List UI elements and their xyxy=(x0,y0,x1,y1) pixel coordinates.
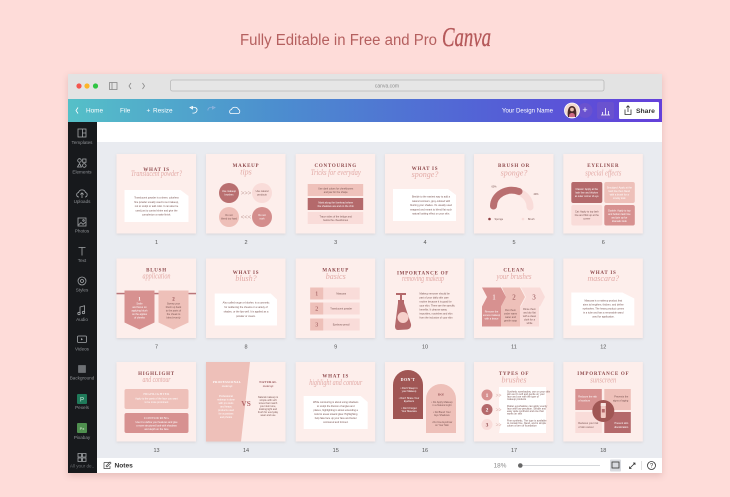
slide 17: types of brushes: TYPES OF xyxy=(499,372,529,377)
tool: background xyxy=(70,365,95,380)
share button: Share xyxy=(636,108,655,115)
slide 5: brush or sponge gauge xyxy=(474,154,554,246)
address bar: canva.com xyxy=(375,84,399,90)
slide 2: makeup tips: products xyxy=(257,194,268,196)
slide 10: importance of removing makeup: benefits. It cleanse away xyxy=(420,308,448,312)
slide 14: professional vs natural makeup: VS xyxy=(241,399,251,408)
slide 11: clean your brushes steps: Run them xyxy=(505,309,516,312)
slide 12: what is mascara: 12 xyxy=(600,344,606,350)
slide 9: makeup basics list: 3 xyxy=(315,322,318,328)
slide 14: professional vs natural makeup: Professional xyxy=(219,395,233,398)
slide 13: highlight and contour: Use it to define your features and give xyxy=(135,421,178,424)
tool: photos: Photos xyxy=(75,228,90,234)
slide 1: translucent powder: Translucent powder is a sheer, colorless xyxy=(134,196,180,200)
slide 3: contouring tricks: Tricks for everyday xyxy=(311,168,361,177)
slide 14: professional vs natural makeup xyxy=(206,362,286,454)
fullscreen icon xyxy=(630,463,635,468)
slide 11: clean your brushes steps: 11 xyxy=(511,344,517,350)
tool: elements: Elements xyxy=(72,170,92,174)
slide 4: what is sponge: WHAT IS xyxy=(412,167,438,172)
slide 14: professional vs natural makeup: 14 xyxy=(243,448,249,454)
slide 11: clean your brushes steps: with a clean xyxy=(523,315,537,318)
slide 11: clean your brushes steps: cloth for a xyxy=(524,318,536,322)
slide 13: highlight and contour xyxy=(116,362,196,454)
design name: Your Design Name xyxy=(502,108,553,114)
tool: uploads xyxy=(74,190,91,204)
slide 3: contouring tricks: and jaw for the shape xyxy=(324,191,348,194)
slide 15: what is highlight and contour: highlight and contour xyxy=(309,378,363,387)
slide 14: professional vs natural makeup: your skin tone, xyxy=(260,405,276,408)
slide 7: blush application: blend evenly xyxy=(166,316,181,320)
left menu: + xyxy=(146,108,150,114)
slide 10: importance of removing makeup: removing makeup xyxy=(402,274,444,283)
tool: pexels xyxy=(75,394,90,410)
slide 5: brush or sponge gauge: sponge? xyxy=(501,168,527,178)
slide 11: clean your brushes steps: while xyxy=(527,322,533,325)
browser window xyxy=(68,74,662,473)
arch: do: Eye Shadows xyxy=(434,414,450,417)
slide 10: importance of removing makeup: part of your daily skin care xyxy=(420,296,449,300)
slide 1: translucent powder: 1 xyxy=(155,240,158,246)
notes button xyxy=(104,462,133,470)
slide 9: makeup basics list: Translucent powder xyxy=(330,308,352,310)
notes button: Notes xyxy=(114,462,133,470)
slide 14: professional vs natural makeup: looking light and xyxy=(259,408,278,411)
slide 13: highlight and contour: Apply to the parts of the face you want xyxy=(135,398,178,400)
slide 12: what is mascara: WHAT IS xyxy=(590,271,617,276)
slide 7: blush application xyxy=(116,258,196,350)
slide 3: contouring tricks: Mark along the forehead where xyxy=(318,202,354,204)
slide 13: highlight and contour: and depth on the face xyxy=(144,428,169,431)
slide 18: importance of sunscreen: Reduces your risk xyxy=(578,422,599,425)
slide 2: makeup tips: brushes xyxy=(225,194,234,196)
slide 11: clean your brushes steps xyxy=(474,258,554,350)
slide 7: blush application: applying blush xyxy=(132,310,148,312)
window shadow xyxy=(68,76,662,476)
tool: all your designs: All your de.. xyxy=(70,464,94,468)
slide 15: what is highlight and contour: While contouring is about using shadows xyxy=(313,401,359,404)
slide 6: eyeliner special effects: 6 xyxy=(602,240,605,246)
traffic lights xyxy=(76,83,98,89)
slide 14: professional vs natural makeup: Natural makeup is xyxy=(258,396,279,399)
tool: pexels: P xyxy=(80,398,84,404)
slide 10: importance of removing makeup xyxy=(385,258,464,350)
help icon: ? xyxy=(650,464,654,470)
slide 14: professional vs natural makeup: fresh for everyday xyxy=(258,411,279,414)
icon: sunscreen tube xyxy=(601,403,606,418)
slide 6: eyeliner special effects: at outer corner of eye xyxy=(575,195,599,198)
slide 11: clean your brushes steps: water and xyxy=(505,316,517,319)
tool: background: Background xyxy=(70,376,95,380)
slide 17: types of brushes: 3 xyxy=(486,422,489,428)
slide 17: types of brushes: face with low precision. Simple and xyxy=(507,408,547,410)
slide 7: blush application: 7 xyxy=(155,344,158,350)
slide 7: blush application: to the parts of xyxy=(166,310,181,312)
arch: do: • Do Apply Makeup xyxy=(431,401,453,404)
slide 9: makeup basics list: 2 xyxy=(315,306,318,312)
slide 14: professional vs natural makeup: makeup xyxy=(263,384,274,388)
slide 3: contouring tricks: Use dark colors for cheekbones xyxy=(318,188,354,190)
slide 6: eyeliner special effects: with a brush for a xyxy=(610,194,629,196)
slide 14: professional vs natural makeup: with pro tools xyxy=(219,402,234,405)
slide 8: what is blush: for reddening the cheeks or a variety of xyxy=(224,306,268,309)
arch: don't: • Don't Forget xyxy=(401,407,417,410)
slide 18: importance of sunscreen: of sunburn xyxy=(578,400,591,402)
slide 17: types of brushes: to contain fine, blend, and is simple xyxy=(507,422,547,425)
slide 17: types of brushes: 17 xyxy=(511,448,517,454)
slide 17: types of brushes: colors a form of foundation xyxy=(507,424,537,428)
slide 12: what is mascara: aims to lengthen, thicken, and define xyxy=(583,304,624,306)
slide 11: clean your brushes steps: with a tissue xyxy=(485,318,499,320)
slide 2: makeup tips: blend too hard xyxy=(221,218,238,220)
slide 14: professional vs natural makeup: makeup xyxy=(222,384,233,388)
slide 13: highlight and contour: a more structured look with shadows xyxy=(136,424,178,428)
slide 8: what is blush: Also called rouge or blusher, is a cosmetic xyxy=(223,302,270,304)
slide 18: importance of sunscreen: Reduces the risk xyxy=(578,396,598,398)
slide 10: importance of removing makeup: routine because it is good for xyxy=(420,300,452,304)
slide 4: what is sponge: Beside to the easiest way to add a xyxy=(412,196,451,198)
slide 1: translucent powder: fine powder usually used to set makeup, xyxy=(134,201,179,204)
slide 4: what is sponge: natural contours, grey-colored with xyxy=(412,200,451,203)
slide 15: what is highlight and contour xyxy=(296,362,375,454)
slide 15: what is highlight and contour: contoured and formed. xyxy=(323,421,349,424)
slide 6: eyeliner special effects: Classic: Apply at the xyxy=(576,188,599,191)
slide 13: highlight and contour: HIGHLIGHT xyxy=(138,372,175,377)
slide 18: importance of sunscreen: sunscreen xyxy=(590,376,616,384)
slide 11: clean your brushes steps: under warm xyxy=(504,312,517,316)
slide 16: don't and do arches xyxy=(385,362,464,454)
tool: styles xyxy=(76,277,89,292)
slide 1: translucent powder: complexion a matte finish. xyxy=(142,214,171,217)
slide 17: types of brushes: Synthetic eyeshadow, use on your skin xyxy=(507,390,551,394)
slide 11: clean your brushes steps: 3 xyxy=(532,294,536,302)
slide 2: makeup tips: MAKEUP xyxy=(233,164,259,169)
arch: do: on Your Skin xyxy=(435,424,450,427)
slide 7: blush application: and focus on xyxy=(132,306,147,309)
tool: audio: Audio xyxy=(76,317,88,322)
slide 9: makeup basics list: Eyebrow pencil xyxy=(333,324,350,326)
left menu: File xyxy=(120,108,131,114)
slide 17: types of brushes: >> xyxy=(496,422,501,428)
slide 7: blush application: 2 xyxy=(172,298,175,302)
slide 6: eyeliner special effects: Cat: Apply to top lash xyxy=(575,210,599,214)
slide 17: types of brushes: face and use with the type of xyxy=(507,396,539,398)
zoom slider xyxy=(518,463,600,468)
address bar xyxy=(170,80,604,91)
tool: pixabay: Pixabay xyxy=(74,435,91,440)
tool: videos: Videos xyxy=(75,346,90,352)
slide 7: blush application: BLUSH xyxy=(146,268,167,274)
slide 12: what is mascara: used for application. xyxy=(592,316,615,318)
tool: elements xyxy=(72,159,92,174)
slide 15: what is highlight and contour: to sculpt the illusion of angles and xyxy=(317,405,355,408)
slide 6: eyeliner special effects: special effects xyxy=(585,168,621,178)
slide 1: translucent powder xyxy=(116,154,196,246)
slide 8: what is blush: powder or cream. xyxy=(236,315,256,318)
slide 3: contouring tricks xyxy=(296,154,375,246)
slide 17: types of brushes: easy quite synthetic and one that xyxy=(507,410,544,413)
slide 18: importance of sunscreen: Prevent skin xyxy=(615,422,629,425)
slide 2: makeup tips: Use natural xyxy=(256,190,269,193)
slide 4: what is sponge: sponge? xyxy=(412,170,438,179)
left menu xyxy=(76,108,173,114)
arch: do: in a Natural Light xyxy=(433,404,452,407)
slide 1: translucent powder: WHAT IS xyxy=(143,168,170,173)
slide 13: highlight and contour: to be more prominent xyxy=(145,401,169,404)
slide 14: professional vs natural makeup: PROFESSIONAL xyxy=(213,380,241,384)
slide 18: importance of sunscreen xyxy=(563,362,643,454)
slide 4: what is sponge: 4 xyxy=(423,240,427,246)
slide 6: eyeliner special effects: corner xyxy=(583,218,591,220)
slide 13: highlight and contour: HIGHLIGHTER xyxy=(143,392,170,396)
slide 17: types of brushes xyxy=(474,362,554,454)
slide 6: eyeliner special effects: line and flick up at the xyxy=(575,214,599,217)
share button xyxy=(619,102,659,119)
slide 17: types of brushes: brushes xyxy=(502,376,526,384)
slide 9: makeup basics list: 9 xyxy=(334,344,337,350)
slide 17: types of brushes: >> xyxy=(496,407,501,413)
slide 6: eyeliner special effects: Double: Apply to top xyxy=(608,210,631,212)
slide 9: makeup basics list: MAKEUP xyxy=(322,268,349,274)
slide 11: clean your brushes steps: CLEAN xyxy=(503,268,525,274)
slide 7: blush application: of cheeks xyxy=(134,316,146,320)
slide 2: makeup tips xyxy=(206,154,286,246)
tool: all your designs xyxy=(70,454,94,468)
slide 15: what is highlight and contour: 15 xyxy=(333,448,339,454)
slide 11: clean your brushes steps: excess makeup xyxy=(483,314,501,317)
avatar xyxy=(564,103,592,118)
slide 1: translucent powder: used just to control shine and give the xyxy=(136,209,178,212)
slide 4: what is sponge: natural looking effect on your skin. xyxy=(412,213,450,216)
slide 2: makeup tips: tips xyxy=(240,168,252,176)
slide 3: contouring tricks: 3 xyxy=(334,240,337,246)
slide 11: clean your brushes steps: 2 xyxy=(512,294,516,302)
slide 4: what is sponge: blurring your shades. It's usually used xyxy=(410,204,452,207)
slide 6: eyeliner special effects: lash line then blend xyxy=(609,190,631,193)
slide 17: types of brushes: Fine synthetic. The type is available xyxy=(507,420,547,422)
slide 10: importance of removing makeup: from the inclusion of your skin xyxy=(420,316,453,320)
slide 11: clean your brushes steps: and dry flat xyxy=(523,312,536,314)
tool: audio xyxy=(76,306,88,322)
slide 6: eyeliner special effects: lash line and thicken xyxy=(575,192,599,194)
slide 10: importance of removing makeup: Makeup remover should be xyxy=(420,292,450,296)
heading: Canva xyxy=(442,22,491,52)
slide 12: what is mascara xyxy=(563,258,643,350)
tool: videos xyxy=(75,336,90,352)
slide 1: translucent powder: Translucent powder? xyxy=(131,169,182,178)
left menu: Resize xyxy=(153,108,173,114)
slide 14: professional vs natural makeup: and photos xyxy=(220,416,233,419)
sidebar toggle icon xyxy=(110,82,117,90)
slide 5: brush or sponge gauge: 5 xyxy=(512,240,516,246)
tool: text: Text xyxy=(78,258,87,263)
tool: uploads: Uploads xyxy=(74,199,91,204)
slide 10: importance of removing makeup: impurities, nourishes and skin xyxy=(420,312,453,316)
slide 9: makeup basics list: Mascara xyxy=(336,292,347,296)
slide 17: types of brushes: 1 xyxy=(486,393,489,399)
slide 3: contouring tricks: the shadows are and on the chin xyxy=(318,205,354,208)
slide 2: makeup tips: <<< xyxy=(241,215,252,221)
slide 7: blush application: on the apples xyxy=(132,313,148,316)
slide 17: types of brushes: 2 xyxy=(486,408,489,414)
arch: do: • Do Use Eyebrow xyxy=(432,421,452,424)
slide 11: clean your brushes steps: gentle soap xyxy=(504,320,518,322)
slide 7: blush application: blush up back xyxy=(166,306,182,309)
slide 8: what is blush: 8 xyxy=(244,344,248,350)
browser title bar xyxy=(68,74,662,99)
slide 6: eyeliner special effects: EYELINER xyxy=(587,164,619,169)
tool: pixabay: Px xyxy=(80,426,84,431)
slide 4: what is sponge: wrapped and meant to blend flat such xyxy=(410,208,452,211)
slide 8: what is blush: shades, or the lips well. It is applied as a xyxy=(224,310,269,314)
slide 2: makeup tips: 2 xyxy=(244,240,248,246)
zoom percentage: 18% xyxy=(494,462,507,470)
slide 14: professional vs natural makeup: products used xyxy=(218,409,234,412)
slide 15: what is highlight and contour: mold to areas toward glow. Highlighting xyxy=(314,413,358,416)
slide 13: highlight and contour: 13 xyxy=(153,448,160,454)
canvas area xyxy=(97,142,662,458)
arch: do: • Do Blend Your xyxy=(433,411,451,414)
heading: Fully Editable in Free and Pro xyxy=(240,32,437,49)
slide 18: importance of sunscreen: signs of aging xyxy=(613,400,629,402)
slide 2: makeup tips: >>> xyxy=(241,191,252,197)
left menu: Home xyxy=(86,108,103,114)
slide 15: what is highlight and contour: WHAT IS xyxy=(322,374,349,380)
slide 2: makeup tips: rush xyxy=(260,218,265,220)
tool: templates: Templates xyxy=(72,140,93,145)
slide 6: eyeliner special effects: smoky look xyxy=(613,197,626,200)
slide 18: importance of sunscreen: of skin cancer xyxy=(578,426,594,429)
slide 12: what is mascara: in a tube and has a removable wand xyxy=(583,312,624,314)
slide 6: eyeliner special effects: dramatic look xyxy=(612,220,627,223)
slide 14: professional vs natural makeup: for occasions xyxy=(219,412,234,416)
slide 6: eyeliner special effects: and bottom lash line xyxy=(608,213,631,216)
slide 16: don't and do arches: 16 xyxy=(422,448,428,454)
slide 7: blush application: 1 xyxy=(138,298,141,302)
slide 7: blush application: the cheek to xyxy=(167,313,181,316)
slide 18: importance of sunscreen: discoloration xyxy=(614,426,629,429)
back and forward arrows xyxy=(129,83,144,89)
bottom status bar xyxy=(97,458,662,473)
slide 8: what is blush xyxy=(206,258,286,350)
slide 18: importance of sunscreen: Prevents the xyxy=(614,396,629,398)
slide 2: makeup tips: Use makeup xyxy=(222,190,237,193)
slide 5: brush or sponge gauge: Brush xyxy=(528,218,535,221)
arch: don't: • Don't Sleep in xyxy=(400,387,418,390)
slide 12: what is mascara: eyelashes. The heavy product comes xyxy=(583,308,625,310)
slide 18: importance of sunscreen: IMPORTANCE OF xyxy=(577,372,629,377)
help icon xyxy=(641,461,656,470)
editor toolbar xyxy=(68,99,662,122)
slide 17: types of brushes: >> xyxy=(496,393,501,399)
avatar: + xyxy=(582,105,588,115)
slide 9: makeup basics list xyxy=(296,258,375,350)
tools sidebar xyxy=(68,122,97,473)
slide 11: clean your brushes steps: 1 xyxy=(492,294,496,302)
slide 5: brush or sponge gauge: Sponge xyxy=(494,218,504,221)
slide 9: makeup basics list: 1 xyxy=(315,292,318,298)
slide 2: makeup tips: Do not xyxy=(225,214,233,217)
slide 6: eyeliner special effects: Smudged: Apply at the xyxy=(607,186,632,190)
slide 3: contouring tricks: CONTOURING xyxy=(314,164,357,169)
tool: pexels: Pexels xyxy=(75,405,90,410)
slide 2: makeup tips: Do not xyxy=(258,214,266,217)
slide 17: types of brushes: works on skin xyxy=(507,412,523,416)
white band above canvas xyxy=(97,122,662,142)
slide 17: types of brushes: makeup products xyxy=(507,398,527,401)
slide 7: blush application: Smile xyxy=(136,302,143,306)
slide 8: what is blush: blush? xyxy=(235,274,257,283)
slide 11: clean your brushes steps: Remove the xyxy=(485,310,499,314)
slide 14: professional vs natural makeup: makeup is done xyxy=(217,398,235,402)
slide 5: brush or sponge gauge: BRUSH OR xyxy=(498,164,530,169)
slide 3: contouring tricks: Trace sides of the bridge and xyxy=(320,216,352,218)
slide 6: eyeliner special effects xyxy=(563,154,643,246)
grid view button xyxy=(610,460,621,472)
slide 14: professional vs natural makeup: simple with soft xyxy=(259,399,277,402)
slide 12: what is mascara: mascara? xyxy=(588,274,619,283)
slide 14: professional vs natural makeup: NATURAL xyxy=(259,380,277,384)
slide 3: contouring tricks: below the cheekbones xyxy=(323,219,349,222)
icon: pump bottle xyxy=(395,293,411,330)
arch: don't: Your Mascara xyxy=(401,410,417,413)
slide 6: eyeliner special effects: and join up for xyxy=(611,216,627,220)
arch: do xyxy=(426,384,456,433)
undo redo and cloud icons xyxy=(190,106,240,114)
slide 14: professional vs natural makeup: tones that match xyxy=(259,402,278,405)
slide 13: highlight and contour: and contour xyxy=(142,375,171,384)
slide 8: what is blush: WHAT IS xyxy=(233,271,259,276)
slide 7: blush application: Sweep your xyxy=(167,302,180,306)
arch: do: DO! xyxy=(438,392,444,396)
slide 10: importance of removing makeup: IMPORTANCE OF xyxy=(397,272,449,276)
slide 15: what is highlight and contour: help fake face up your face and better xyxy=(315,417,357,420)
slide 1: translucent powder: not to sculpt or add color. It can also be xyxy=(135,205,179,208)
slide 15: what is highlight and contour: planes, highlighting is about extending a xyxy=(313,409,359,412)
tool: pixabay xyxy=(74,423,91,440)
tool: text xyxy=(78,248,87,263)
tool: templates xyxy=(72,129,93,145)
slide 13: highlight and contour: CONTOURING xyxy=(144,416,169,420)
slide 7: blush application: application xyxy=(142,272,170,280)
slide 5: brush or sponge gauge: 40% xyxy=(533,193,539,196)
arch: don't: your Makeup xyxy=(402,390,417,393)
arch: don't xyxy=(393,370,423,419)
slide 17: types of brushes: Flatter eyeshadow, can apply evenly xyxy=(507,405,548,408)
slide 11: clean your brushes steps: your brushes xyxy=(496,272,532,281)
slide 14: professional vs natural makeup: and heavy xyxy=(220,406,233,408)
slide 10: importance of removing makeup: 10 xyxy=(422,344,428,350)
slide 10: importance of removing makeup: your skin. There are the specific xyxy=(420,304,456,308)
insights button xyxy=(597,102,614,119)
slide 18: importance of sunscreen: 18 xyxy=(600,448,606,454)
slide 11: clean your brushes steps: Rinse them xyxy=(523,308,536,311)
tool: styles: Styles xyxy=(76,288,89,292)
slide 14: professional vs natural makeup: wear and use xyxy=(260,414,276,417)
arch: don't: DON'T xyxy=(401,377,415,382)
slide 17: types of brushes: skin as it's soft and gentle on your xyxy=(507,393,545,396)
slide 9: makeup basics list: basics xyxy=(326,272,346,281)
slide 5: brush or sponge gauge: 60% xyxy=(491,186,497,188)
tool: photos xyxy=(75,218,90,234)
arch: don't: Eyeliners xyxy=(404,400,415,403)
arch: don't: • Don't Share Your xyxy=(399,397,419,400)
heading xyxy=(240,22,491,52)
slide 4: what is sponge xyxy=(385,154,464,246)
slide 12: what is mascara: Mascara is a makeup product that xyxy=(584,300,622,302)
